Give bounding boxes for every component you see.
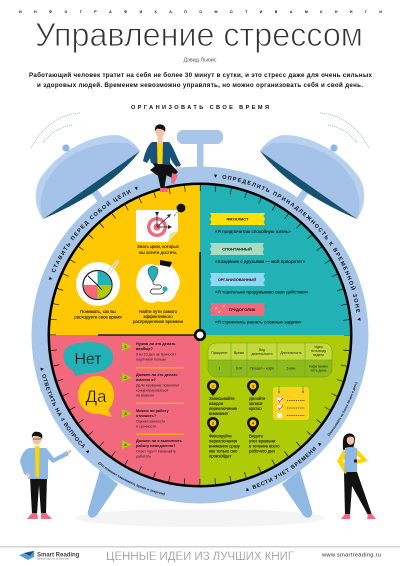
- question 1: Нужно ли это делать: [136, 342, 176, 346]
- question 3: и срочности: [136, 424, 156, 428]
- clock face quadrants: [48, 182, 352, 488]
- tape: organized: [210, 273, 265, 286]
- question 1: [122, 342, 176, 362]
- time log table: 1: [219, 366, 221, 370]
- tape: spontaneous: СПОНТАННЫЙ: [222, 246, 252, 252]
- standing woman: [337, 433, 376, 519]
- footer slogan: ЦЕННЫЕ ИДЕИ ИЗ ЛУЧШИХ КНИГ: [106, 551, 295, 563]
- standing man: [20, 432, 72, 519]
- caption: how you spend time: Понимать, как вы: [80, 309, 116, 314]
- question 1: ощутимой пользы: [136, 358, 166, 362]
- caption: how you spend time: [74, 309, 122, 320]
- question 3: [122, 409, 170, 428]
- clock hands: [98, 252, 200, 335]
- question 2: 2: [124, 376, 126, 380]
- ring label: set goals: ▼ СТАВИТЬ ПЕРЕД СОБОЙ ЦЕЛИ ▼: [48, 186, 138, 280]
- clock legs: [88, 470, 312, 518]
- caption: find ways: эффективного: [143, 314, 173, 319]
- question 4: 4: [124, 443, 126, 447]
- step text 1: внимания: [209, 411, 228, 416]
- step text 2: как только оно: [209, 448, 238, 454]
- step text 4: в течение всего: [249, 444, 280, 448]
- speech bubble: yes: [78, 376, 114, 417]
- step pin 3: 3: [252, 384, 254, 388]
- icon: route on blob: [136, 260, 180, 303]
- step text 4: учет времени: [249, 438, 276, 444]
- ring label: answer 4 questions: ▲ ОТВЕТИТЬ НА 4 ВОПРОСА ▲: [40, 368, 90, 454]
- ring label: track time: ▲ ВЕСТИ УЧЕТ ВРЕМЕНИ ▲: [246, 442, 322, 492]
- quote: workaholic: «Я стремлюсь решать сложные задачи»: [215, 320, 302, 324]
- ring note: saves time: (Это поможет сэкономить время и энергию): [98, 462, 165, 496]
- website: www.smartreading.ru: [321, 552, 381, 558]
- minute ticks: [53, 188, 347, 482]
- time log table: Приоритет: [211, 351, 228, 355]
- intro text: Работающий человек тратит на себя не более 30 минут в сутки, и это стресс даже для очень сильных: [29, 72, 373, 79]
- tape: workaholic: ТРУДОГОЛИК: [229, 307, 256, 312]
- speech bubble: no: [64, 342, 113, 376]
- step pin 2: [207, 417, 219, 433]
- tape: workaholic: [210, 303, 265, 316]
- step text 1: Записывайте: [209, 396, 235, 401]
- clock centre: [195, 330, 205, 340]
- step text 2: внимания сразу: [209, 444, 241, 448]
- ringing waves left: [31, 113, 80, 148]
- section heading: ОРГАНИЗОВАТЬ СВОЕ ВРЕМЯ: [131, 105, 269, 111]
- caption: find ways: Найти пути самого: [139, 309, 178, 314]
- author: Дэвид Льюис: [183, 58, 217, 64]
- question 4: работать: [136, 454, 151, 458]
- question 1: 8 из 10 дел не приносят: [136, 352, 176, 356]
- footer rule: [0, 546, 400, 548]
- time log table: Вид: [259, 348, 265, 352]
- time log table: 9.00: [236, 366, 242, 370]
- speech bubble: no: Нет: [74, 351, 102, 368]
- question 4: Должен ли я выполнить: [136, 439, 183, 443]
- time log table: Прошел – кофе: [250, 366, 274, 370]
- tape: spontaneous: [210, 243, 264, 255]
- time log table: Время: [234, 351, 244, 355]
- header label: И Н Ф О Г Р А Ф И К А П О М О Т И В А М К Н И Г И: [19, 10, 382, 14]
- icon: checklist note: [273, 386, 309, 420]
- step text 2: переключения: [209, 438, 237, 444]
- logo: Smart Reading: [37, 552, 80, 558]
- caption: find ways: [133, 309, 184, 324]
- question 3: Можно ли работу: [136, 409, 170, 413]
- time log table: Идеи: [315, 345, 323, 349]
- step text 3: [249, 396, 266, 411]
- question 4: Ответ «да»? Начинайте: [136, 450, 176, 454]
- logo: Ценные идеи из лучших книг: [37, 558, 69, 560]
- left bell: [36, 135, 140, 219]
- quote: spontaneous: «Хождение с друзьями — мой приоритет»: [215, 258, 306, 264]
- time log table: Длительность: [280, 351, 302, 355]
- icon: pie clock: [76, 261, 120, 306]
- caption: know goals: вы хотите достичь: [139, 250, 177, 255]
- step pin 1: 1: [212, 384, 214, 388]
- question 2: Должен ли это делать: [136, 373, 178, 377]
- step text 1: каждое: [209, 401, 224, 406]
- ring note: ten minutes: (Записывайте не более 10 мин в день): [328, 382, 358, 436]
- quote: fatalist: «Я предпочитаю спокойную жизнь»: [215, 228, 291, 234]
- question 2: именно я?: [136, 378, 156, 382]
- step text 1: [209, 396, 238, 416]
- step text 2: [209, 434, 241, 458]
- tape: fatalist: [210, 213, 265, 225]
- intro text: [29, 72, 373, 89]
- time log table: 5 мин: [287, 366, 296, 370]
- time log table: пить дома: [311, 368, 326, 372]
- step pin 4: 4: [252, 422, 255, 426]
- ring label: define time zone: ▼ ОПРЕДЕЛИТЬ ПРИНАДЛЕЖНОСТЬ К ВРЕМЕННОЙ ЗОНЕ ▼: [214, 174, 360, 321]
- question 4: работу немедленно?: [136, 444, 176, 448]
- question 1: 1: [124, 345, 126, 349]
- step text 1: переключение: [209, 406, 238, 411]
- question 3: Оценка важности: [136, 420, 165, 424]
- question 4: [122, 439, 183, 458]
- floor shadow: [75, 509, 325, 527]
- step pin 1: [207, 380, 219, 396]
- question 3: отложить?: [136, 414, 157, 418]
- time log table: Кофе можно: [309, 364, 328, 368]
- question 2: [122, 373, 180, 398]
- step text 3: кратко: [249, 406, 262, 411]
- quote: organized: «Я тщательно продумываю свои действия»: [215, 288, 309, 294]
- tape: fatalist: ФАТАЛИСТ: [226, 216, 249, 222]
- title: Управление стрессом: [35, 16, 363, 53]
- step text 4: [249, 434, 280, 454]
- time log table: деятельности: [251, 352, 273, 356]
- question 2: на важном: [136, 394, 154, 398]
- step text 4: Ведите: [249, 434, 264, 438]
- step text 2: Фиксируйте: [209, 434, 232, 438]
- intro text: и здоровых людей. Временем невозможно управлять, но можно организовать себя и свой день.: [37, 82, 363, 89]
- clock body ring: [32, 166, 368, 504]
- question 2: Делегирование позволяет: [136, 384, 180, 388]
- step text 3: Делайте: [249, 396, 266, 401]
- time log table: недели: [313, 353, 324, 357]
- question 3: 3: [124, 412, 126, 416]
- time log table: по поводу: [311, 349, 326, 353]
- caption: how you spend time: расходуете свое время: [74, 314, 122, 320]
- step text 2: произойдет: [209, 454, 231, 458]
- step pin 2: 2: [212, 422, 214, 426]
- question 2: концентрироваться: [136, 388, 168, 392]
- logo: [19, 551, 80, 560]
- question 1: вообще?: [136, 347, 154, 351]
- tape: organized: ОРГАНИЗОВАННЫЙ: [218, 278, 256, 282]
- step pin 4: [247, 417, 259, 433]
- step text 3: записи: [249, 401, 263, 406]
- icon: target card: [136, 204, 185, 242]
- time log table: [208, 343, 332, 377]
- ringing waves right: [320, 113, 369, 148]
- step pin 3: [247, 380, 259, 396]
- step text 4: рабочего дня: [249, 448, 275, 454]
- speech bubble: yes: Да: [86, 387, 107, 406]
- right bell: [260, 135, 364, 219]
- sitting man: [143, 124, 182, 192]
- caption: know goals: [137, 244, 180, 255]
- top handle: [177, 130, 223, 172]
- caption: know goals: Знать цели, которых: [137, 244, 180, 249]
- caption: find ways: распределения времени: [133, 319, 184, 324]
